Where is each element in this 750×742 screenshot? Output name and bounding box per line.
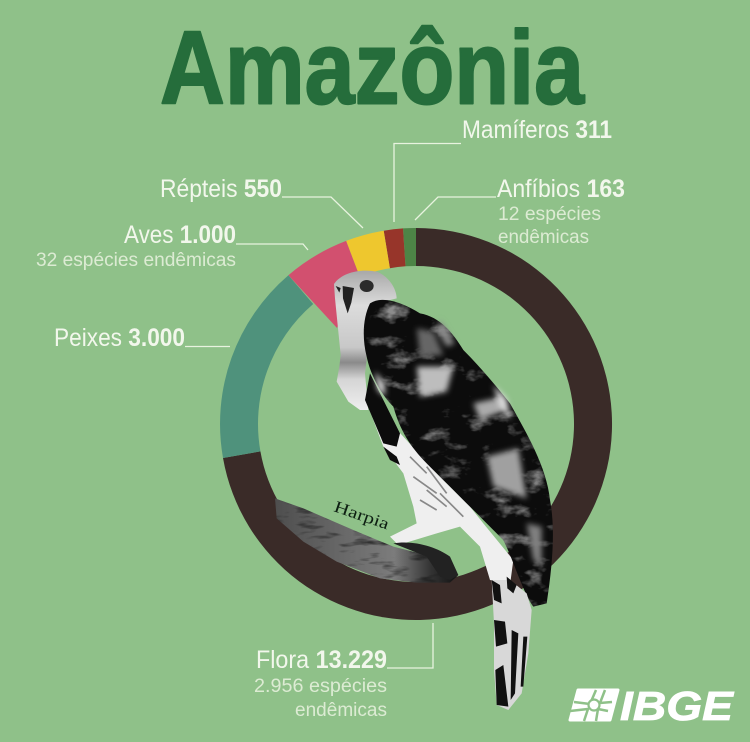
label: anfíbios: Anfíbios 163 [497,175,625,203]
label: anfíbios [415,175,625,248]
segment: peixes [220,275,313,458]
bird body [363,393,513,585]
chest feather marks [410,447,463,517]
illustration: harpy eagle on branch [275,271,553,710]
caption: Harpia: Harpia [332,497,393,534]
tail [492,577,532,710]
label: répteis: Répteis 550 [160,175,282,203]
eye [360,280,374,292]
label: anfíbios: 12 espécies [498,204,601,225]
label: flora: 2.956 espécies [254,676,387,697]
label: flora: endêmicas [295,700,387,721]
logo icon [570,690,618,721]
label: aves: Aves 1.000 [124,221,236,249]
beak [336,286,354,313]
segment: anfíbios [403,228,416,266]
logo: IBGE [570,683,735,729]
segment: aves [288,241,360,328]
label: anfíbios: endêmicas [498,227,589,248]
main wing [364,300,553,607]
label: aves [36,221,308,271]
label: répteis [160,175,363,228]
segment: mamíferos [384,228,406,268]
segment: flora [223,228,612,620]
segment: répteis [346,231,390,276]
label: mamíferos [394,116,612,222]
label: aves: 32 espécies endêmicas [36,250,236,271]
head [334,271,397,410]
branch [275,498,458,583]
inner wing [365,373,400,465]
wing highlights [375,320,542,567]
label: flora: Flora 13.229 [256,646,387,674]
talons [393,542,458,580]
label: peixes: Peixes 3.000 [54,324,185,352]
label: mamíferos: Mamíferos 311 [462,116,612,144]
logo wordmark: IBGE [620,683,735,729]
title: Amazônia [160,10,585,126]
label: flora [254,623,433,721]
donut chart [220,228,612,620]
